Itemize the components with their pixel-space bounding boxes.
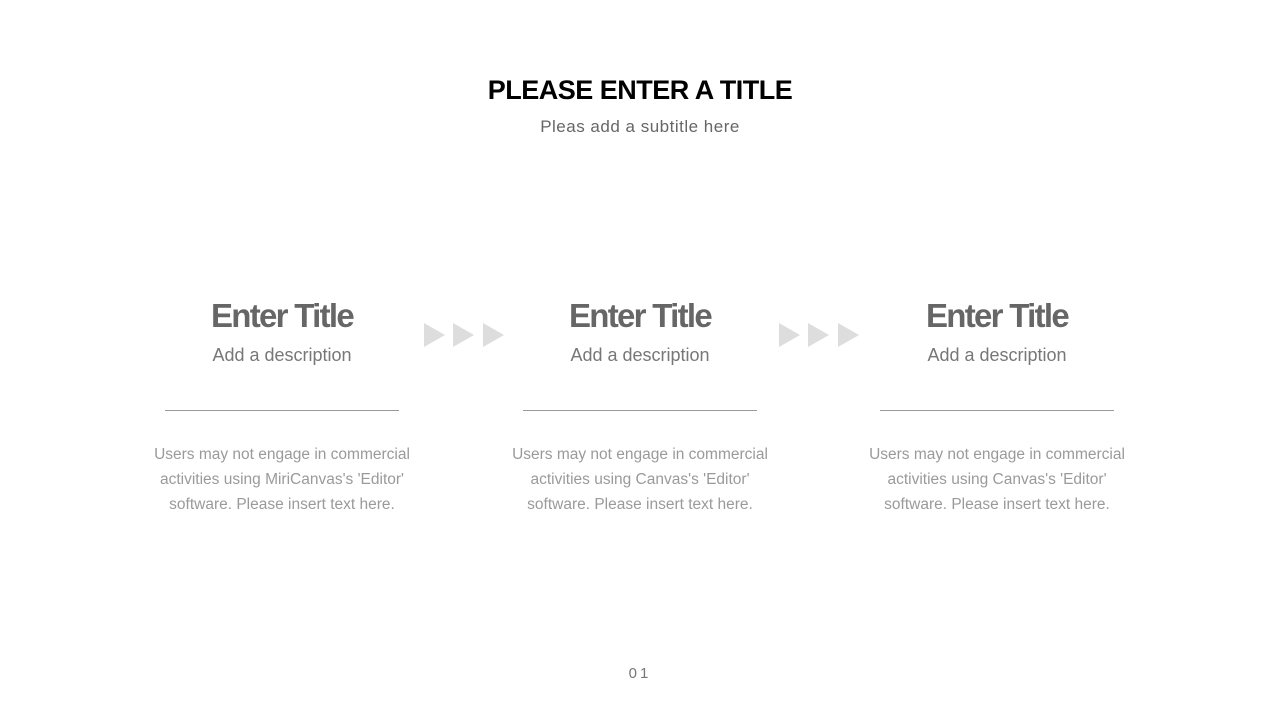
page number: 01	[629, 665, 651, 682]
description: Add a description	[570, 345, 710, 365]
panel: step 3	[869, 297, 1125, 513]
arrow: triple triangles 1	[424, 323, 504, 347]
heading: Enter Title	[569, 297, 711, 334]
body text: Users may not engage in commercial activities using Canvas's 'Editor' software. Please insert text here.	[512, 446, 768, 513]
heading: Enter Title	[926, 297, 1068, 334]
body text: Users may not engage in commercial activities using MiriCanvas's 'Editor' software. Please insert text here.	[154, 446, 410, 513]
heading: Enter Title	[211, 297, 353, 334]
description: Add a description	[927, 345, 1067, 365]
arrow: triple triangles 2	[779, 323, 859, 347]
panel: step 2	[512, 297, 768, 513]
title: PLEASE ENTER A TITLE	[488, 75, 792, 105]
subtitle: Pleas add a subtitle here	[540, 117, 740, 136]
body text: Users may not engage in commercial activities using Canvas's 'Editor' software. Please insert text here.	[869, 446, 1125, 513]
panel: step 1	[154, 297, 410, 513]
description: Add a description	[212, 345, 352, 365]
